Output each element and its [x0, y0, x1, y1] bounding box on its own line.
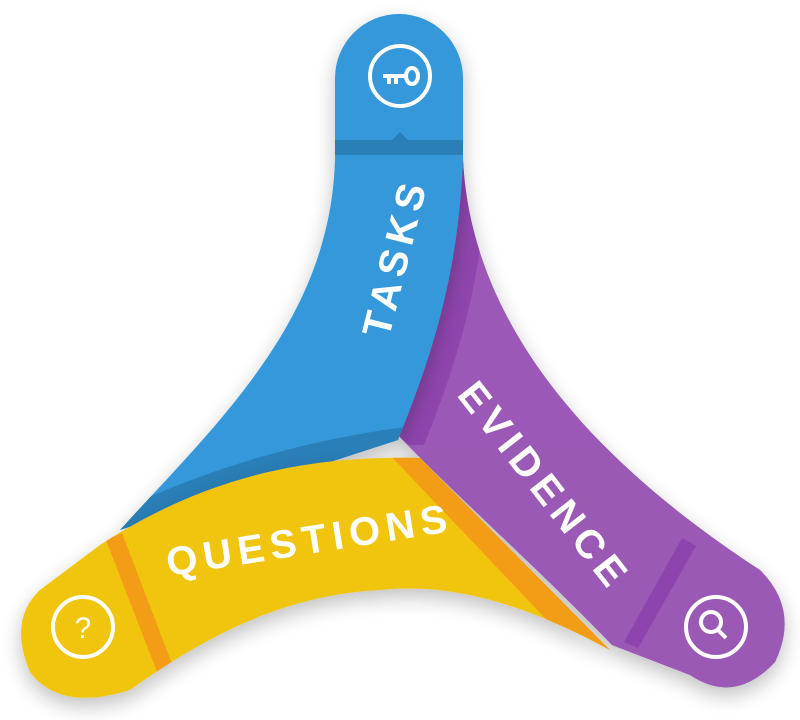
icon: key — [370, 46, 430, 106]
panel: evidence arm — [398, 150, 785, 687]
label: QUESTIONS: QUESTIONS — [163, 496, 456, 585]
label: EVIDENCE: EVIDENCE — [449, 373, 639, 600]
icon: question: ? — [75, 612, 91, 645]
panel: questions arm — [21, 455, 640, 698]
icon: magnifier — [686, 597, 746, 657]
icon: question — [53, 597, 113, 657]
panel: tasks arm — [100, 14, 470, 560]
label: TASKS: TASKS — [355, 173, 437, 342]
panel: evidence arm lower overlay — [408, 445, 785, 688]
